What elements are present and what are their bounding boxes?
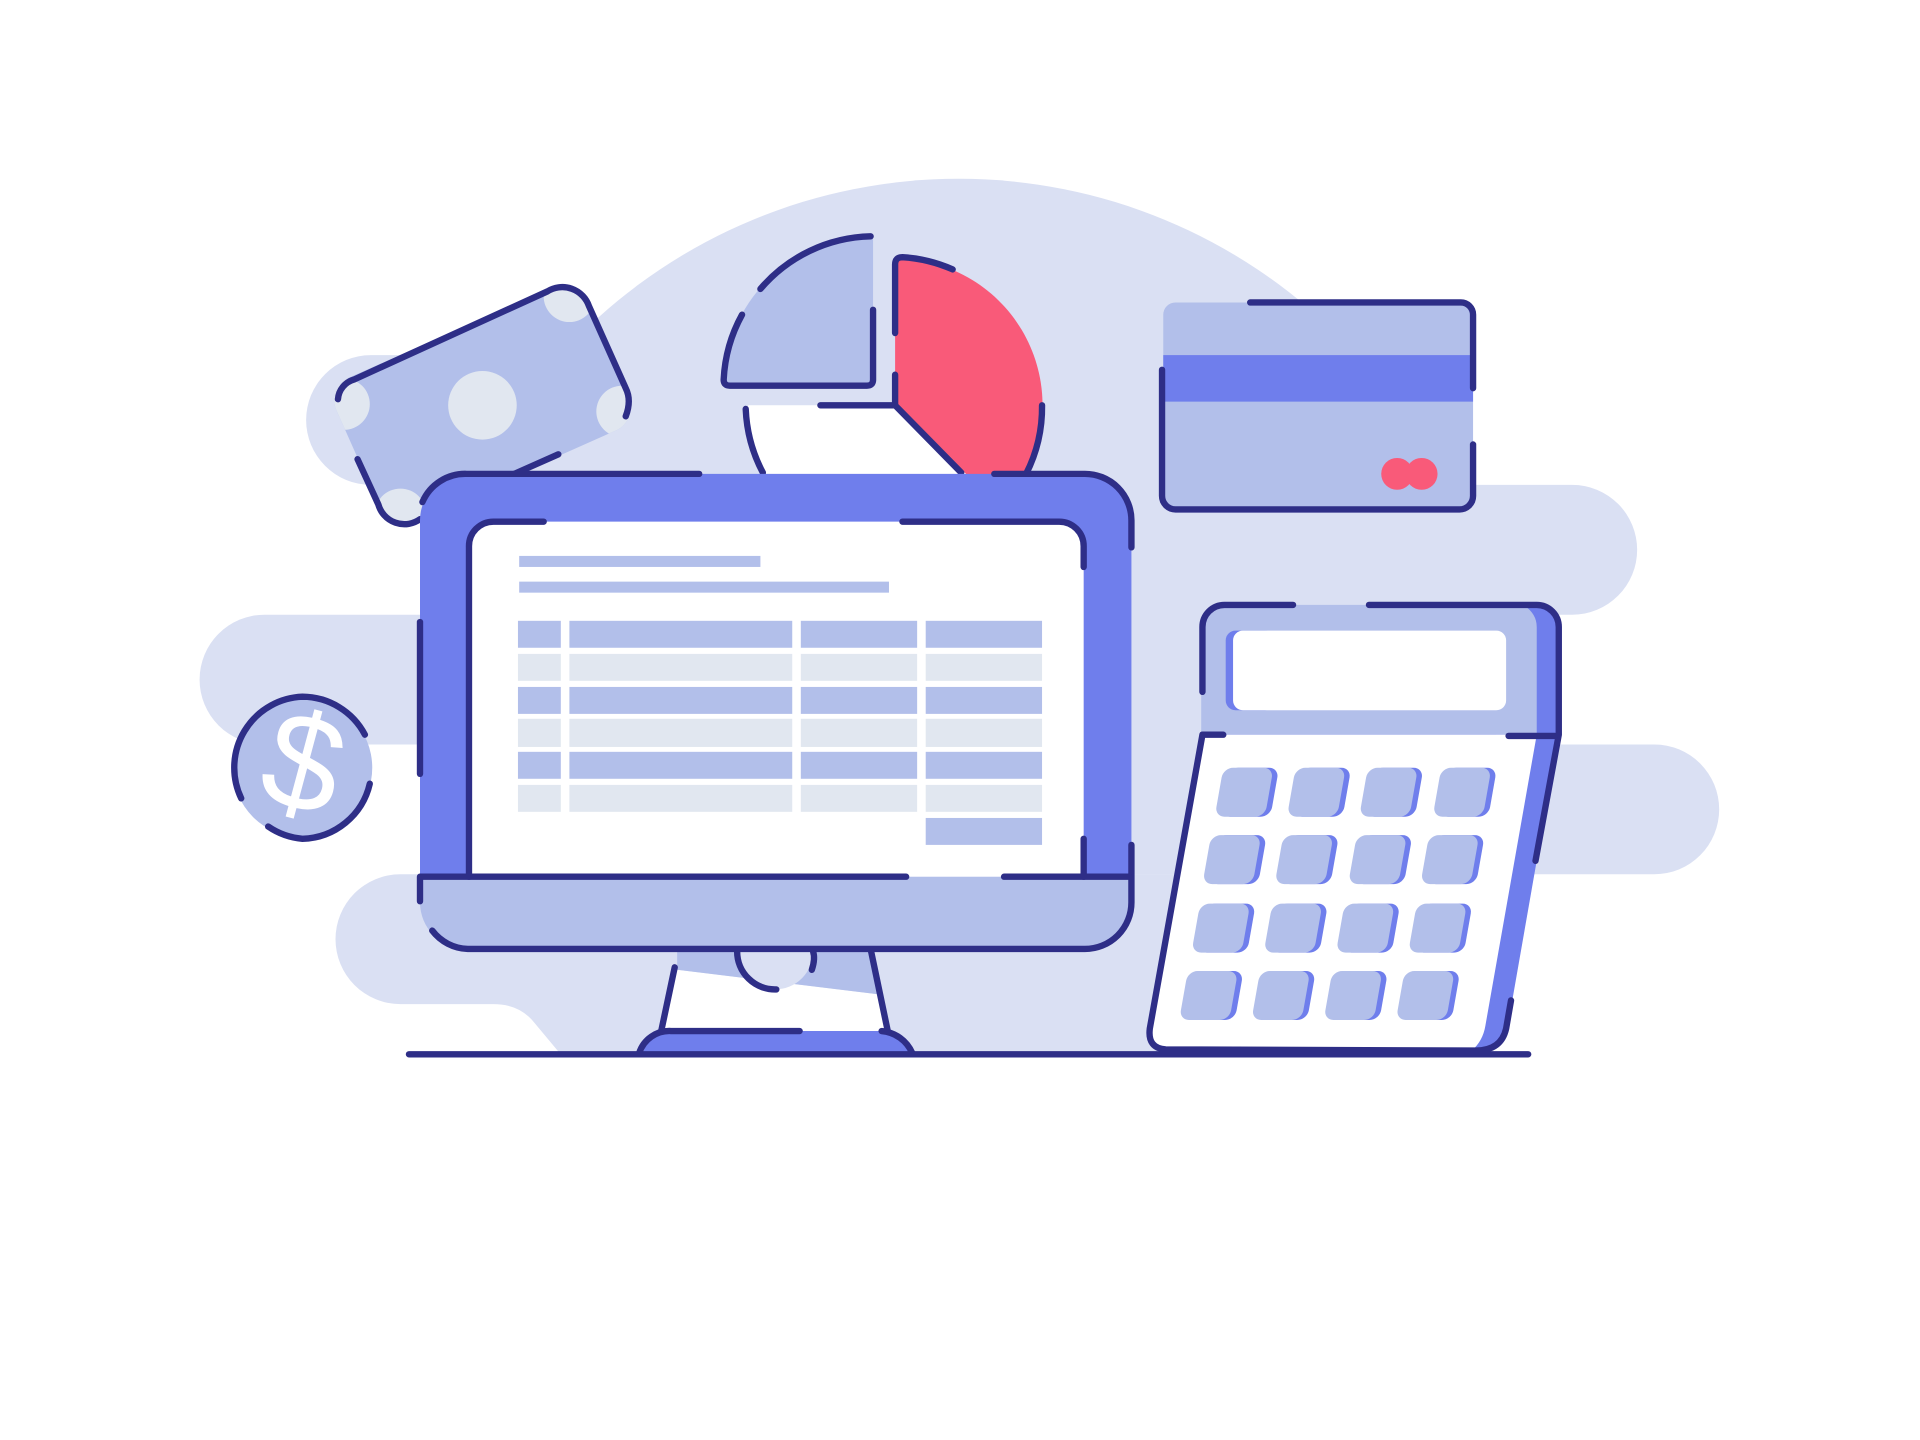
monitor screen <box>469 522 1084 877</box>
calculator display <box>1226 631 1506 710</box>
calculator <box>1150 605 1559 1051</box>
calculator head <box>1201 605 1559 735</box>
background blob <box>200 178 1720 1052</box>
ground line <box>409 1052 1528 1057</box>
monitor stand <box>639 913 912 1053</box>
icon: dollar coin: $ <box>247 679 360 847</box>
chart: pie chart <box>724 236 1043 475</box>
spreadsheet heading lines <box>519 556 889 593</box>
calculator body <box>1150 735 1559 1051</box>
pie slice: pink <box>895 258 1043 475</box>
calculator keys <box>1179 768 1497 1020</box>
monitor <box>420 474 1131 949</box>
pie slice: white lower segment <box>748 405 967 475</box>
pie slice: blue quarter <box>724 236 873 386</box>
monitor bezel <box>420 474 1131 877</box>
spreadsheet table <box>518 621 1042 845</box>
icon: credit card <box>1162 302 1473 509</box>
monitor chin <box>420 877 1131 949</box>
icon: banknote <box>334 284 632 528</box>
